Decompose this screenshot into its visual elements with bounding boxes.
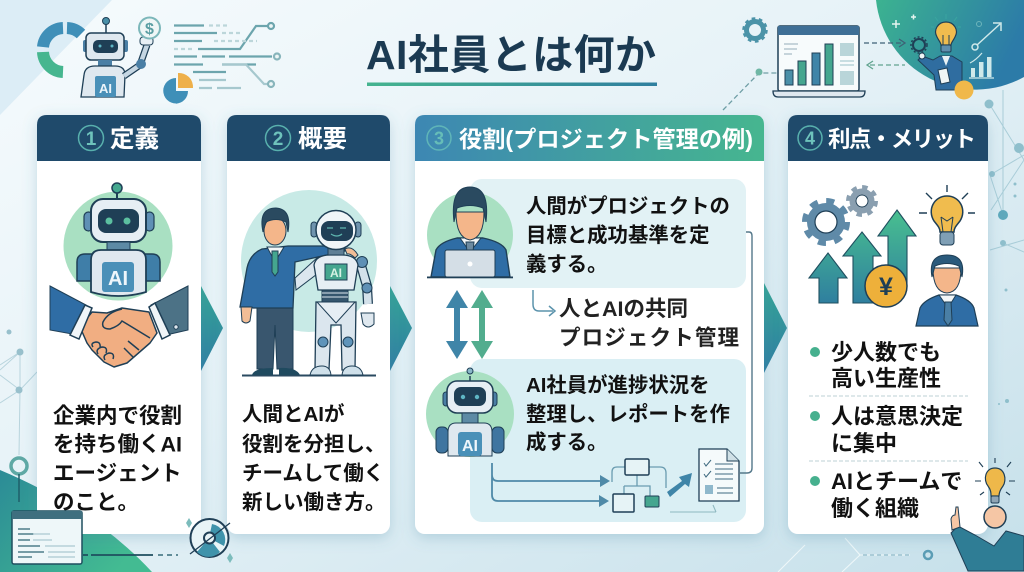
bullet 2: に集中 [831,431,897,456]
list: benefits [809,340,968,521]
icon: robot holding coin [81,18,160,97]
header: definition: 定義 [110,125,159,153]
illustration: browser panel, bottom-left [12,511,82,564]
icon: AI robot [426,368,514,457]
text: overview: 役割を分担し、 [242,433,386,456]
text: AI role: 整理し、レポートを作 [526,403,730,426]
header: definition [37,115,201,161]
header: role: 3 [434,128,444,148]
header: benefits: 4 [805,128,815,148]
icon: business person [916,255,978,326]
panel: role [12,115,1024,571]
bullet 1: 少人数でも [831,340,941,365]
header: definition: 1 [86,129,97,150]
network decoration: bottom [778,538,932,572]
bullet 1 [810,340,941,391]
flow diagram [492,449,739,512]
header: role: 役割(プロジェクト管理の例) [459,126,753,152]
panel: overview [227,115,391,534]
connecting chevrons [201,283,787,373]
icon: gears [805,187,876,243]
header: overview: 概要 [298,125,347,153]
box: human role [427,179,746,288]
header: overview [227,115,390,161]
icon: robot holding coin: $ [145,21,154,38]
icon: human and robot side by side [240,190,377,376]
panel: benefits [788,115,988,534]
panel: definition [37,115,201,534]
icon: robot [64,183,172,300]
header: role [415,115,764,161]
text: human role: 人間がプロジェクトの [526,194,730,218]
icon: pie chart [163,73,193,104]
human [257,306,293,369]
text: shared management: 人とAIの共同 [559,297,688,321]
icon: AI robot: AI [462,438,478,455]
connector to shared management [533,290,555,316]
bullet 3: AIとチームで [831,469,962,494]
icon: bidirectional arrows [446,290,493,359]
dashed connector and target [83,518,233,563]
text: overview: 新しい働き方。 [242,491,386,514]
box: AI role [426,232,752,522]
text: definition: エージェント [53,462,182,486]
bullet 2: 人は意思決定 [831,404,963,429]
text: definition: 企業内で役割 [53,404,182,428]
illustration: person with idea, bottom-right [951,458,1024,571]
illustration: top-left robot and data [43,18,280,104]
text: shared management: プロジェクト管理 [559,326,739,350]
illustration: top-right dashboard and idea [723,14,1001,110]
icon: donut chart [43,28,81,72]
dashed connectors [723,39,905,110]
text: definition: を持ち働くAI [53,432,182,456]
icon: light bulb [919,185,975,245]
icon: robot holding coin: AI [99,81,112,96]
icon: human with laptop [427,187,513,278]
bullet 2 [810,404,963,456]
bullet 1: 高い生産性 [831,366,941,391]
icon: yen coin [865,265,907,307]
text: human role: 目標と成功基準を定 [526,223,710,247]
bullet 3: 働く組織 [831,496,919,521]
text: definition: のこと。 [53,490,139,514]
network decoration: left [0,330,37,502]
title underline [367,82,657,86]
text lines and connectors [174,23,280,88]
text: overview: チームして働く [242,462,384,485]
icon: robot: AI [108,268,128,290]
network decoration: right [984,90,1024,405]
icon: handshake [50,286,188,367]
icon: laptop bar chart [773,26,865,97]
icon: growth arrows [809,210,916,303]
header: benefits: 利点・メリット [828,127,976,152]
title: AI社員とは何か [366,32,656,78]
robot [315,302,356,370]
icon: human and robot side by side: AI [330,266,342,280]
connector: feedback line [740,232,752,473]
text: human role: 義する。 [526,253,608,276]
icon: gear [744,19,766,41]
icon: person with light bulb head [892,14,1001,100]
text: AI role: 成する。 [526,430,608,454]
bullet 3 [810,469,962,521]
text: AI role: AI社員が進捗状況を [526,373,710,397]
icon: yen coin: ¥ [879,273,893,301]
header: benefits [788,115,988,161]
header: overview: 2 [273,129,283,150]
text: overview: 人間とAIが [242,402,345,426]
